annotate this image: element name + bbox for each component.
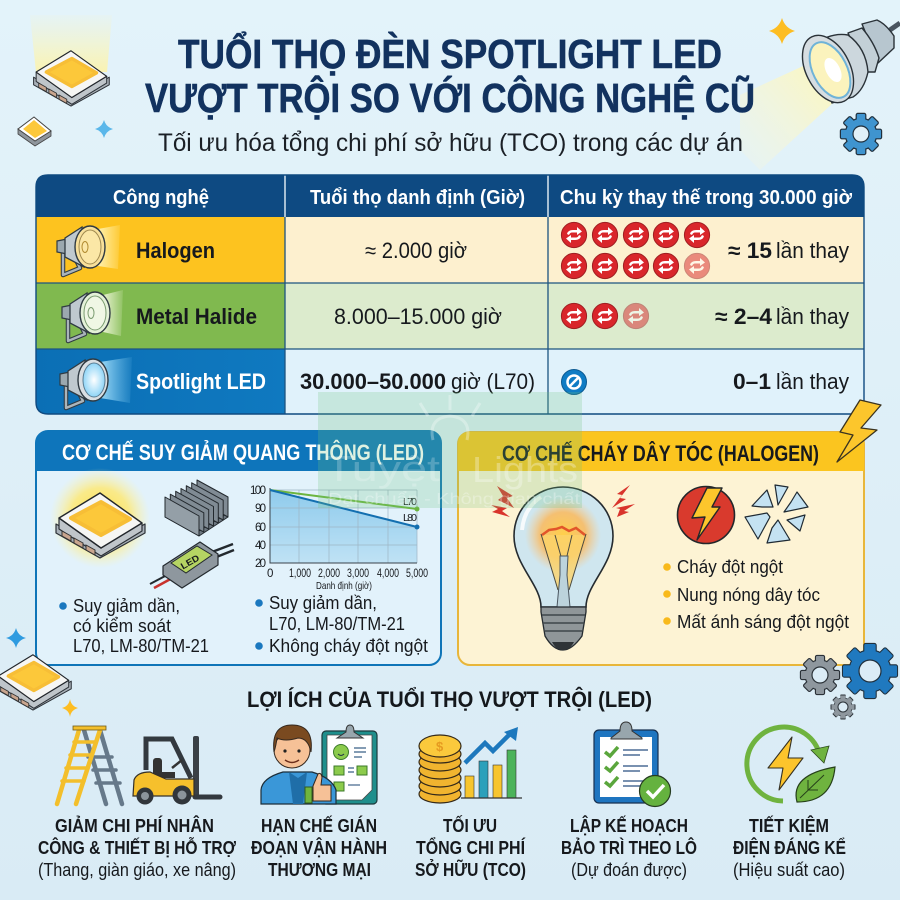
watermark: Lights (472, 449, 578, 490)
icon: checklist clipboard (594, 722, 670, 806)
benefit 1 text: CÔNG & THIẾT BỊ HỖ TRỢ (38, 837, 236, 858)
x axis labels: 4,000 (377, 568, 399, 580)
line labels (403, 496, 417, 524)
icon: shattered glass (745, 485, 808, 543)
column heading: replacement cycle: Chu kỳ thay thế trong 30.000 giờ (560, 187, 853, 209)
panel: LED lumen depreciation (36, 431, 441, 665)
benefit 5 text: (Hiệu suất cao) (733, 859, 845, 880)
decoration: blue gear large (843, 644, 897, 698)
icon: coins (419, 735, 461, 803)
icons: metal halide replacements (561, 303, 649, 329)
decoration: yellow star left (62, 699, 78, 717)
benefit 1 text: GIẢM CHI PHÍ NHÂN (55, 815, 214, 836)
icons: halogen replacements (561, 222, 710, 279)
halogen bullet list: Cháy đột ngột (677, 556, 783, 577)
value: LED replacements (733, 369, 849, 394)
comparison table (36, 175, 864, 414)
decoration: top-left LED chip with beam (30, 15, 112, 106)
x axis labels (267, 568, 428, 580)
benefit 2 text (251, 815, 387, 880)
icon: red sparks (491, 485, 635, 517)
LED row (36, 349, 864, 414)
icon: energy cycle (747, 727, 835, 802)
value: LED life (300, 369, 535, 394)
icon: lightning in red circle (678, 486, 734, 544)
halogen bullet list: Nung nóng dây tóc (677, 584, 820, 605)
value: LED life: giờ (L70) (451, 369, 535, 394)
y axis labels: 90 (255, 503, 266, 515)
decoration: yellow star (769, 18, 795, 44)
icon: lightning bolt (837, 400, 881, 462)
right bullet list: Không cháy đột ngột (269, 635, 428, 656)
decoration: gray gear (801, 656, 839, 694)
benefit 4 text: BẢO TRÌ THEO LÔ (561, 837, 697, 858)
panel: halogen filament failure (458, 432, 864, 665)
halogen row (36, 217, 864, 283)
watermark: Tuyệt (325, 448, 440, 489)
label: Halogen: Halogen (136, 238, 215, 263)
subtitle: Tối ưu hóa tổng chi phí sở hữu (TCO) trong các dự án (158, 129, 743, 157)
x axis labels: 5,000 (406, 568, 428, 580)
halogen bullet list: Mất ánh sáng đột ngột (677, 611, 849, 632)
panel header (36, 431, 441, 471)
panel heading: CƠ CHẾ CHÁY DÂY TÓC (HALOGEN) (502, 441, 819, 466)
benefit 4 text: (Dự đoán được) (571, 859, 687, 880)
benefit 2: limit disruption (251, 725, 387, 880)
panel header (458, 432, 864, 471)
icon: clipboard with smile (322, 725, 377, 804)
decoration: ceiling spotlight with beam (740, 20, 900, 170)
benefit 1 text: (Thang, giàn giáo, xe nâng) (38, 859, 236, 880)
decoration: LED chip left (0, 655, 71, 710)
value: LED life: 30.000–50.000 (300, 369, 446, 394)
x axis title: Danh định (giờ) (316, 580, 372, 592)
y axis labels: 40 (255, 540, 266, 552)
bulb screw base (541, 607, 586, 650)
x axis labels: 1,000 (289, 568, 311, 580)
y axis labels: 100 (250, 485, 266, 497)
icon: LED chip (50, 468, 150, 568)
benefit 2 text: ĐOẠN VẬN HÀNH (251, 837, 387, 858)
label: Spotlight LED: Spotlight LED (136, 369, 266, 394)
benefit 5 text: TIẾT KIỆM (749, 815, 829, 836)
title: VƯỢT TRỘI SO VỚI CÔNG NGHỆ CŨ (145, 75, 755, 121)
chart: lumen maintenance (250, 485, 428, 592)
decoration: small LED chip (18, 117, 51, 146)
benefit 5: energy saving (733, 727, 846, 880)
L70 line (270, 490, 420, 512)
value: halogen replacements: lần thay (776, 238, 849, 263)
value: halogen replacements: ≈ 15 (728, 238, 772, 263)
value: halogen replacements (728, 238, 849, 263)
watermark (318, 392, 582, 508)
icon: ladder (57, 726, 122, 804)
y axis labels: 20 (255, 558, 266, 570)
x axis labels: 3,000 (347, 568, 369, 580)
value: halogen life: ≈ 2.000 giờ (365, 238, 467, 263)
icon: coins: $ (436, 739, 444, 754)
icon: halogen bulb (514, 487, 613, 650)
right bullet list (255, 592, 428, 656)
decoration: blue star (95, 120, 113, 138)
icon: LED driver (150, 542, 234, 588)
benefit 5 text: ĐIỆN ĐÁNG KỂ (733, 837, 846, 858)
benefit 3 text: TỔNG CHI PHÍ (416, 837, 526, 858)
icon: growth chart (461, 727, 522, 798)
decoration: blue star left (6, 628, 26, 648)
halogen bullet list (663, 556, 849, 632)
decoration: blue gear (841, 114, 881, 154)
left bullet list: L70, LM-80/TM-21 (73, 635, 209, 656)
line labels: L70 (403, 496, 417, 508)
title (145, 30, 755, 121)
value: LED replacements: lần thay (776, 369, 849, 394)
watermark: Đạt chuẩn - Không gian chất (328, 490, 581, 508)
L80 line (270, 490, 420, 530)
value: metal halide replacements: ≈ 2–4 (715, 304, 773, 329)
benefit 4: batch maintenance (561, 722, 697, 880)
benefit 3 text: TỐI ƯU (443, 815, 497, 836)
icon: businessman thumbs up (261, 725, 336, 804)
left bullet list: có kiểm soát (73, 615, 171, 636)
y axis labels (250, 485, 266, 570)
benefit 1: labour and equipment (38, 726, 236, 880)
metal halide row (36, 283, 864, 349)
column heading: technology: Công nghệ (113, 187, 209, 209)
right bullet list: Suy giảm dần, (269, 592, 377, 613)
benefit 3 text: SỞ HỮU (TCO) (415, 859, 526, 880)
benefit 2 text: THƯƠNG MẠI (268, 859, 371, 880)
heading: benefits: LỢI ÍCH CỦA TUỔI THỌ VƯỢT TRỘI (LED) (247, 687, 652, 712)
value: LED replacements: 0–1 (733, 369, 771, 394)
benefit 2 text: HẠN CHẾ GIÁN (261, 815, 377, 836)
icon: forklift (133, 736, 220, 804)
title: TUỔI THỌ ĐÈN SPOTLIGHT LED (178, 30, 722, 77)
icon: no replacement (562, 370, 586, 394)
table header row (36, 175, 864, 217)
decoration: small gray gear (830, 694, 856, 720)
benefit 1 text (38, 815, 236, 880)
right bullet list: L70, LM-80/TM-21 (269, 613, 405, 634)
benefit 3: optimise TCO (415, 727, 526, 880)
y axis labels: 60 (255, 522, 266, 534)
icon: LED spotlight (60, 357, 132, 408)
value: metal halide replacements: lần thay (776, 304, 849, 329)
panel heading: CƠ CHẾ SUY GIẢM QUANG THÔNG (LED) (62, 440, 424, 465)
value: metal halide replacements (715, 304, 849, 329)
benefit 5 text (733, 815, 846, 880)
x axis labels: 2,000 (318, 568, 340, 580)
x axis labels: 0 (267, 568, 273, 580)
value: metal halide life: 8.000–15.000 giờ (334, 304, 502, 329)
icon: halogen lamp (57, 225, 120, 275)
benefit 3 text (415, 815, 526, 880)
benefit 4 text (561, 815, 697, 880)
left bullet list: Suy giảm dần, (73, 595, 180, 616)
benefit 4 text: LẬP KẾ HOẠCH (570, 815, 688, 836)
icon: metal halide lamp (62, 290, 123, 341)
label: Metal Halide: Metal Halide (136, 304, 257, 329)
left bullet list (59, 595, 209, 656)
icon: heat sink (165, 480, 228, 536)
column heading: rated life: Tuổi thọ danh định (Giờ) (310, 187, 525, 209)
icon: LED driver: LED (179, 552, 202, 571)
line labels: L80 (403, 512, 417, 524)
